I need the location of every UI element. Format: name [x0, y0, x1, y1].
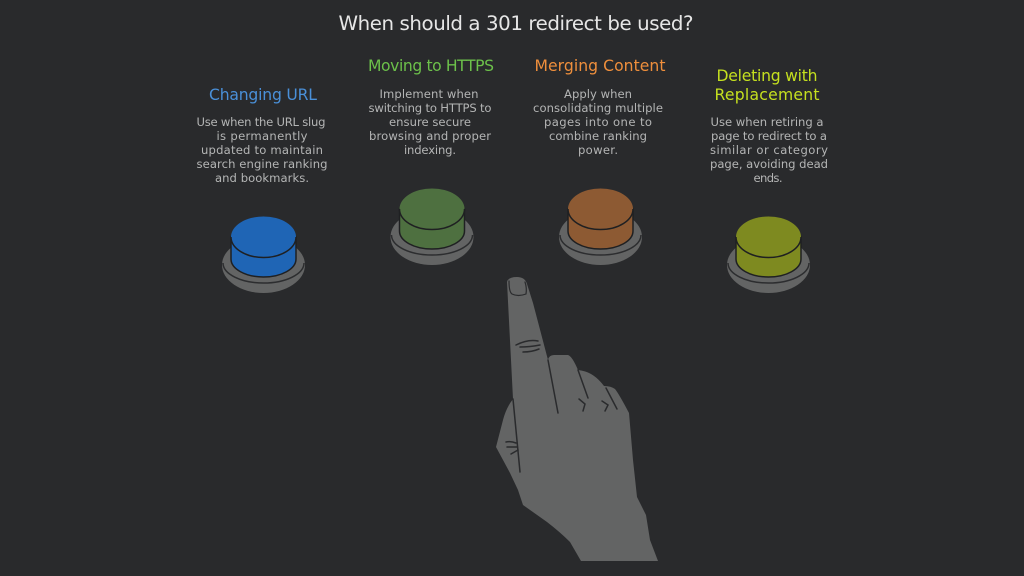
panel: changing URL: [196, 86, 328, 293]
text: moving to HTTPS description: ensure secure: [389, 115, 471, 129]
text: moving to HTTPS description: browsing and proper: [369, 129, 491, 143]
icon: blue button: [222, 216, 305, 293]
text: deleting with replacement description: page to redirect to a: [711, 129, 827, 143]
heading: changing URL: Changing URL: [209, 86, 317, 104]
icon: olive button: [727, 216, 810, 293]
heading: deleting with replacement: Deleting with: [716, 67, 818, 85]
text: changing URL description: and bookmarks.: [215, 171, 309, 185]
text: merging content description: consolidating multiple: [533, 101, 663, 115]
heading: merging content: Merging Content: [534, 57, 666, 75]
icon: pointing hand: [496, 277, 658, 561]
text: deleting with replacement description: page, avoiding dead: [710, 157, 828, 171]
panel: merging content: [533, 57, 666, 265]
text: changing URL description: [196, 115, 328, 185]
text: moving to HTTPS description: [368, 87, 492, 157]
text: deleting with replacement description: [710, 115, 828, 185]
text: deleting with replacement description: Use when retiring a: [710, 115, 824, 129]
text: moving to HTTPS description: indexing.: [404, 143, 456, 157]
heading: moving to HTTPS: Moving to HTTPS: [368, 57, 494, 75]
text: deleting with replacement description: similar or category: [710, 143, 828, 157]
heading: deleting with replacement: [714, 67, 820, 104]
text: moving to HTTPS description: switching to HTTPS to: [368, 101, 492, 115]
text: changing URL description: updated to maintain: [201, 143, 323, 157]
icon: green button: [390, 188, 474, 265]
text: changing URL description: Use when the URL slug: [196, 115, 326, 129]
text: merging content description: Apply when: [564, 87, 632, 101]
text: changing URL description: is permanently: [216, 129, 308, 143]
heading: deleting with replacement: Replacement: [714, 86, 820, 104]
text: changing URL description: search engine ranking: [196, 157, 328, 171]
icon: orange button: [559, 188, 642, 265]
panel: moving to HTTPS: [368, 57, 494, 265]
text: merging content description: [533, 87, 663, 157]
text: merging content description: pages into one to: [544, 115, 652, 129]
text: merging content description: combine ranking: [549, 129, 647, 143]
panel: deleting with replacement: [710, 67, 828, 293]
text: deleting with replacement description: ends.: [754, 171, 782, 185]
title: When should a 301 redirect be used?: [338, 12, 694, 35]
text: merging content description: power.: [578, 143, 618, 157]
text: moving to HTTPS description: Implement when: [380, 87, 478, 101]
